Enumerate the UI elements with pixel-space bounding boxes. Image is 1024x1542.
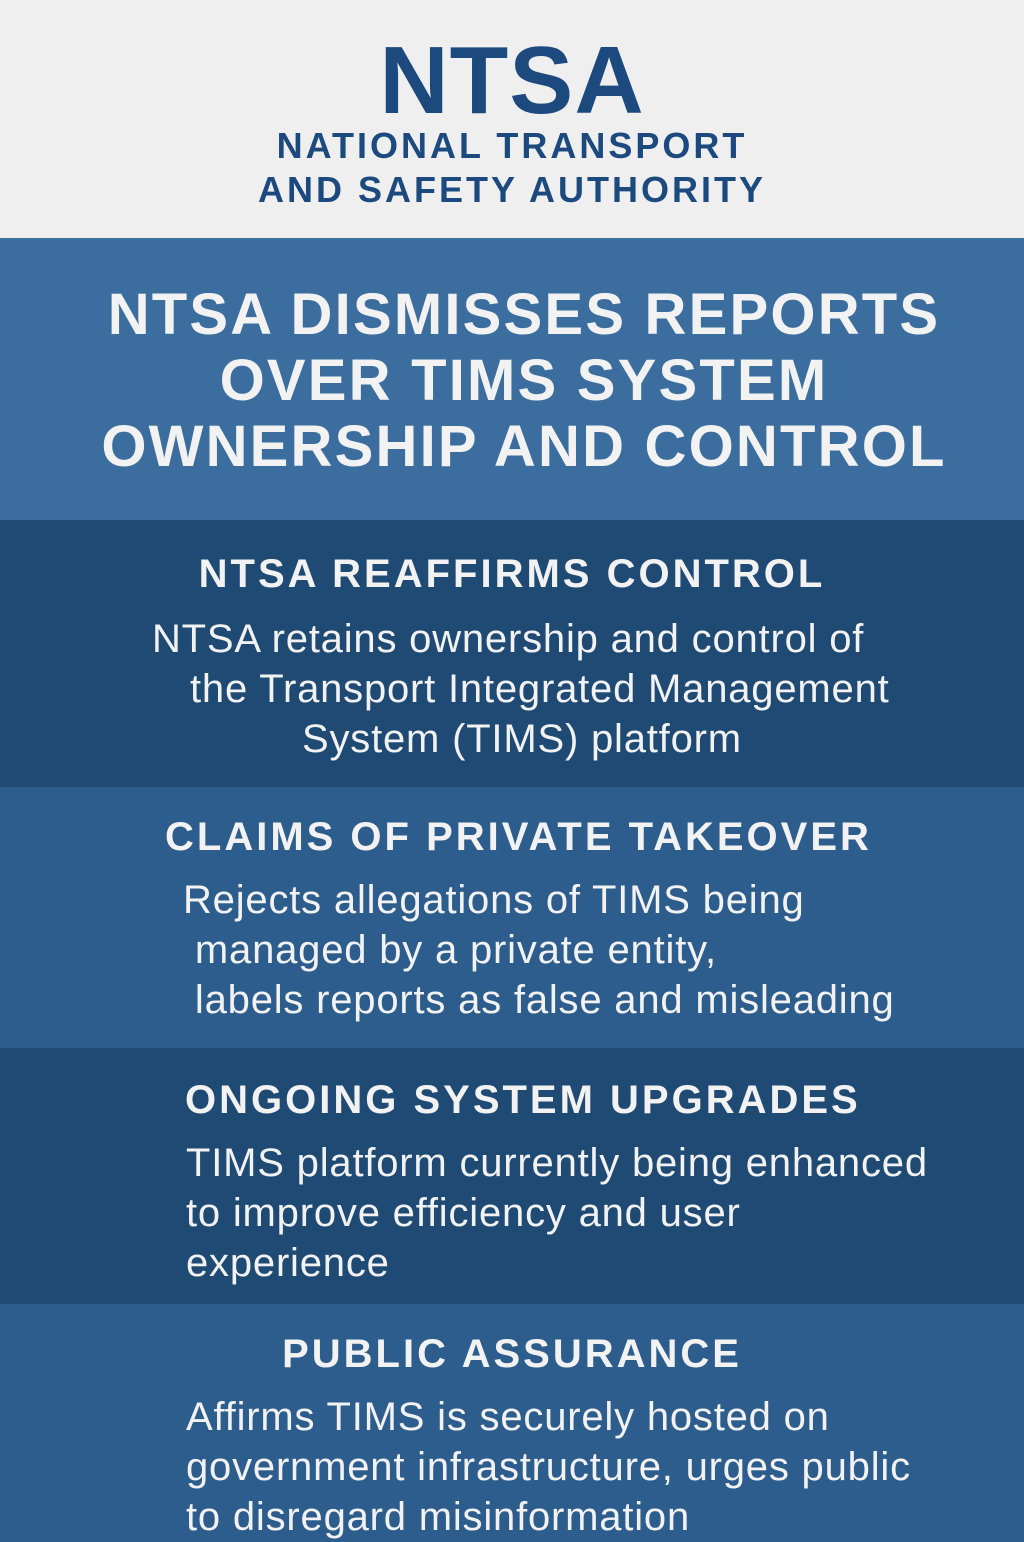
main headline: NTSA DISMISSES REPORTS [108,282,940,347]
title band [0,238,1024,520]
body: the Transport Integrated Management [190,667,890,711]
subtitle: NATIONAL TRANSPORT [277,125,747,166]
header [0,0,1024,238]
main headline: OVER TIMS SYSTEM [220,348,828,413]
body: Rejects allegations of TIMS being [183,878,805,922]
body: NTSA retains ownership and control of [152,617,864,661]
body: to disregard misinformation [186,1495,690,1539]
panel: public assurance [0,1304,1024,1536]
main headline: OWNERSHIP AND CONTROL [101,414,947,479]
body [186,1141,928,1285]
body: TIMS platform currently being enhanced [186,1141,928,1185]
body [152,617,890,761]
body [183,878,895,1022]
panel: upgrades [0,1048,1024,1304]
main headline [101,282,947,479]
panel: reaffirms control [0,520,1024,787]
heading: PUBLIC ASSURANCE [282,1332,742,1376]
body: government infrastructure, urges public [186,1445,911,1489]
heading: NTSA REAFFIRMS CONTROL [199,552,825,596]
panel: private takeover [0,787,1024,1048]
body: managed by a private entity, [195,928,717,972]
body: to improve efficiency and user [186,1191,741,1235]
body: labels reports as false and misleading [195,978,895,1022]
body: System (TIMS) platform [302,717,742,761]
body [186,1395,911,1539]
body: experience [186,1241,390,1285]
subtitle: AND SAFETY AUTHORITY [258,169,766,210]
subtitle [258,125,766,210]
heading: ONGOING SYSTEM UPGRADES [185,1078,861,1122]
heading: CLAIMS OF PRIVATE TAKEOVER [165,815,872,859]
logo title: NTSA [379,27,645,134]
body: Affirms TIMS is securely hosted on [186,1395,830,1439]
